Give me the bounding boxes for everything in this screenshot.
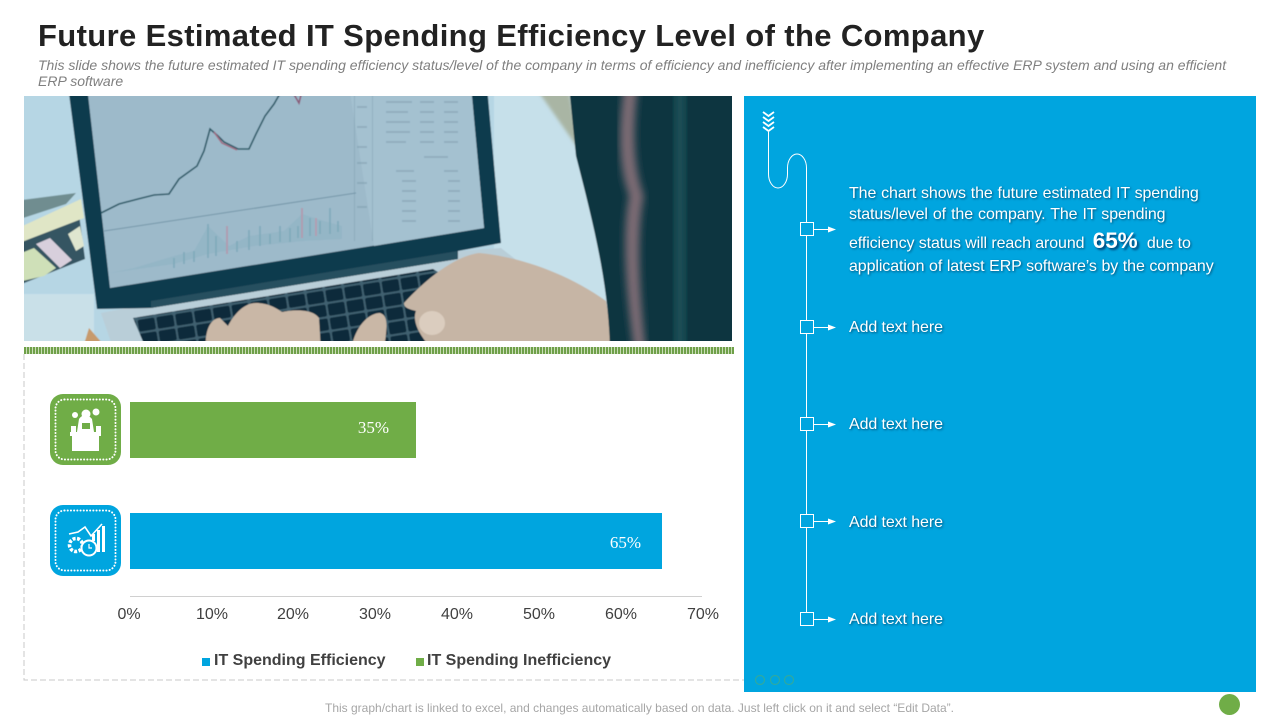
bar: IT Spending Inefficiency 35% <box>130 402 416 458</box>
text: application of latest ERP software’s by the company <box>849 258 1214 275</box>
footer note: This graph/chart is linked to excel, and changes automatically based on data. Just left click on it and select “Edit Data”. <box>325 701 954 715</box>
item text 1: Add text here <box>849 319 943 336</box>
axis labels: 0% <box>117 606 141 623</box>
icon: growth chart and gears <box>50 505 121 576</box>
timeline connector <box>755 111 836 686</box>
bar: IT Spending Inefficiency 35%: 35% <box>358 418 389 437</box>
bar: IT Spending Efficiency 65%: 65% <box>610 533 641 552</box>
axis labels: 70% <box>687 606 719 623</box>
bar chart <box>50 394 702 597</box>
axis line <box>130 596 702 597</box>
legend: IT Spending Efficiency <box>214 652 386 669</box>
main description text: The chart shows the future estimated IT spending <box>849 185 1199 202</box>
decorative circles <box>756 676 794 684</box>
photo: laptop with stock chart <box>24 96 732 341</box>
legend: IT Spending Inefficiency <box>427 652 611 669</box>
item text 4: Add text here <box>849 611 943 628</box>
text: efficiency status will reach around 65% due to <box>849 228 1191 253</box>
axis labels: 30% <box>359 606 391 623</box>
bar: IT Spending Efficiency 65% <box>130 513 662 569</box>
title: Future Estimated IT Spending Efficiency Level of the Company <box>38 18 985 53</box>
laptop base <box>101 248 534 351</box>
item text 3: Add text here <box>849 514 943 531</box>
hair <box>538 91 580 151</box>
axis labels: 40% <box>441 606 473 623</box>
volume bars <box>110 214 342 273</box>
page marker circle <box>1219 694 1240 715</box>
dashed chart frame <box>24 354 744 680</box>
axis labels: 10% <box>196 606 228 623</box>
axis labels: 50% <box>523 606 555 623</box>
keyboard <box>133 269 506 351</box>
desk paper <box>14 294 94 351</box>
text: status/level of the company. The IT spending <box>849 206 1165 223</box>
hands <box>404 253 614 351</box>
hatched green divider <box>24 347 734 354</box>
item text 2: Add text here <box>849 416 943 433</box>
axis labels: 20% <box>277 606 309 623</box>
subtitle: This slide shows the future estimated IT spending efficiency status/level of the company in terms of efficiency and inefficiency after implementing an effective ERP system and using an efficient ERP software <box>38 57 1226 88</box>
laptop lid and hinge <box>68 86 501 309</box>
legend <box>202 652 611 669</box>
icon: office desk <box>50 394 121 465</box>
axis labels: 60% <box>605 606 637 623</box>
icon: chevrons <box>763 112 774 131</box>
panel: blue description <box>744 96 1256 692</box>
sticky notes <box>14 214 85 287</box>
axis labels <box>117 606 719 623</box>
